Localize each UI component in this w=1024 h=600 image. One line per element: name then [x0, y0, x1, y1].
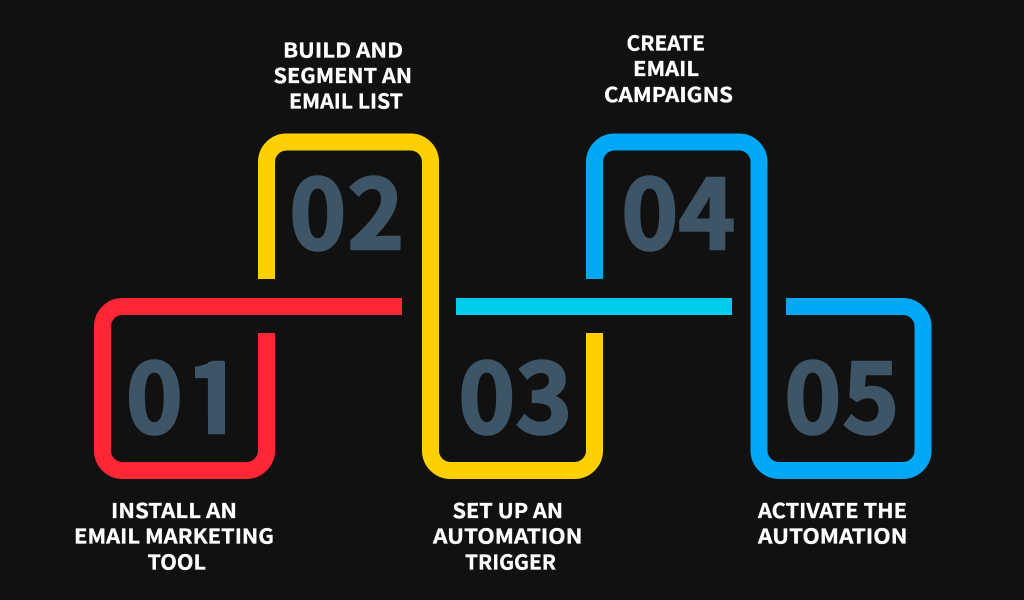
label: step 1: [74, 494, 274, 576]
blue line: step 4 and step 5 boxes: [594, 142, 923, 470]
label: step 3: SET UP AN: [452, 494, 563, 524]
number 04: 04: [622, 138, 735, 277]
label: step 2: [274, 34, 412, 114]
red line: step 1 box: [102, 306, 402, 470]
label: step 5: ACTIVATE THE: [757, 494, 907, 524]
label: step 3: [432, 494, 582, 576]
label: step 2: EMAIL LIST: [289, 84, 403, 114]
label: step 5: [757, 494, 908, 550]
label: step 4: EMAIL: [633, 52, 699, 82]
number 03: 03: [458, 322, 572, 461]
label: step 4: CAMPAIGNS: [604, 78, 733, 108]
yellow line: step 2 and step 3 boxes: [266, 142, 594, 470]
label: step 4: [604, 26, 733, 108]
label: step 3: AUTOMATION: [432, 520, 582, 550]
label: step 4: CREATE: [626, 26, 705, 56]
label: step 1: EMAIL MARKETING: [74, 520, 274, 550]
label: step 2: SEGMENT AN: [274, 59, 412, 89]
label: step 3: TRIGGER: [465, 546, 556, 576]
number 02: 02: [290, 138, 404, 277]
number 05: 05: [784, 322, 899, 461]
number 01: 01: [126, 322, 243, 461]
label: step 5: AUTOMATION: [757, 520, 908, 550]
label: step 1: INSTALL AN: [111, 494, 237, 524]
cyan connector line: [456, 298, 732, 315]
label: step 1: TOOL: [148, 546, 206, 576]
label: step 2: BUILD AND: [283, 34, 403, 64]
